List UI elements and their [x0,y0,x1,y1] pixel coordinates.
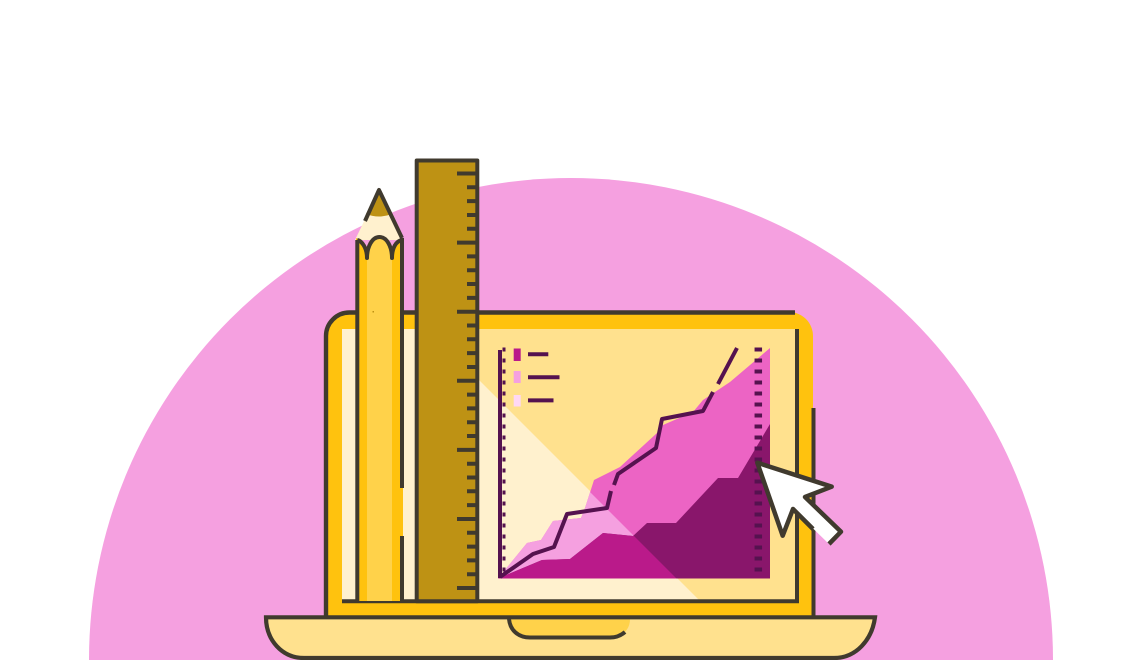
lid outline [326,312,795,618]
trackpad notch [509,619,630,638]
right dotted axis [755,348,762,572]
ruler ticks [457,174,477,588]
background pink semicircle [89,178,1053,660]
pencil body [356,237,403,601]
illustration [89,158,1053,660]
lower area series [498,424,770,578]
pencil speck [372,311,374,312]
laptop base [266,617,875,658]
trend line [500,348,737,577]
pencil outline [357,190,402,603]
pencil [355,190,403,603]
area chart [498,348,770,578]
left axis [500,348,504,578]
pencil graphite [366,190,392,216]
ruler [417,160,477,601]
screen outline [342,329,797,601]
legend [514,348,560,406]
upper area series [498,348,770,578]
cursor arrow [757,463,841,544]
pencil tip [355,190,403,240]
base outline [266,617,875,658]
laptop lid [326,312,814,618]
laptop screen [342,329,797,601]
